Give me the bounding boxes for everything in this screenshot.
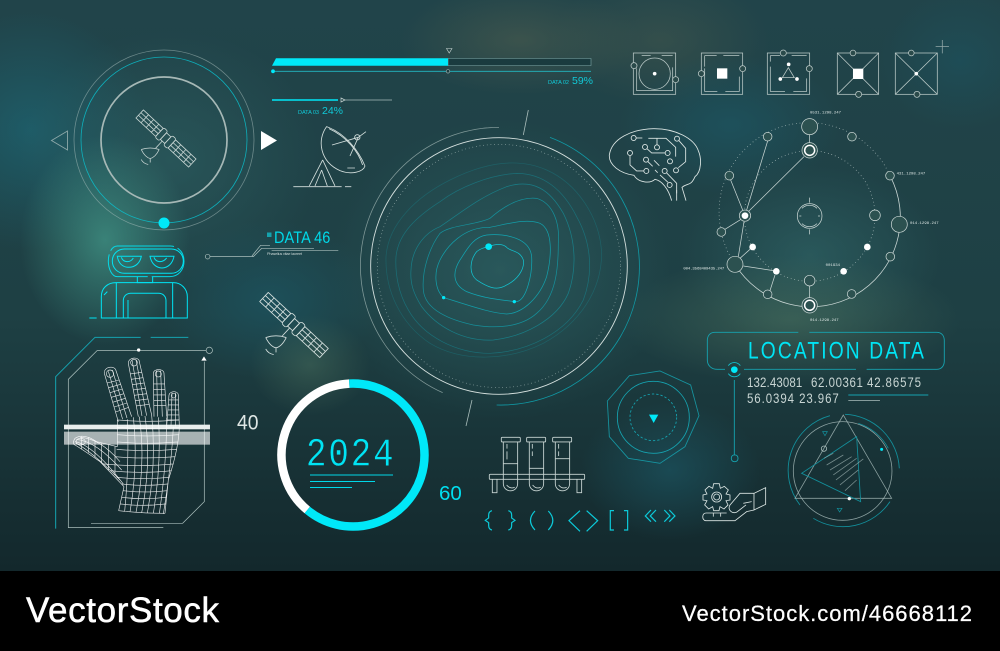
- middle finger: [128, 358, 152, 417]
- links: [725, 135, 810, 298]
- donut 2024: [281, 384, 424, 527]
- data 46 label: Phasellus vitae laoreet: [267, 252, 303, 256]
- contour map: [360, 110, 639, 405]
- bar: data 03: 24%: [322, 105, 343, 117]
- label: 40: 40: [237, 412, 258, 435]
- bar: data 02: [271, 48, 593, 87]
- bar: data 02: 59%: [572, 75, 593, 87]
- node labels: 014.1298.247: [910, 222, 939, 226]
- thumb: [73, 436, 124, 487]
- index finger: [104, 367, 132, 422]
- frame inner: [68, 347, 212, 528]
- data 46 label: DATA 46: [274, 229, 330, 247]
- hub: [797, 204, 822, 228]
- donut 2024: 2024: [306, 433, 394, 478]
- wordmark: VectorStock: [26, 591, 220, 630]
- icon row: frames: [631, 40, 949, 97]
- bar: data 02: DATA 02: [548, 80, 569, 86]
- marker dots: [442, 243, 516, 303]
- bar: data 03: [272, 98, 392, 117]
- frame 4: [837, 50, 879, 97]
- frame 2: [698, 53, 746, 94]
- data 46 label: [205, 229, 338, 259]
- coordinates: 132.43081: [747, 375, 802, 390]
- footer band: [0, 571, 1000, 651]
- icon: gear and hand: [703, 484, 766, 521]
- node labels: 014.1298.247: [810, 319, 839, 323]
- icon: satellite: [115, 109, 197, 189]
- plus mark: [936, 40, 949, 53]
- scan bars: [64, 425, 210, 429]
- coordinates: 56.0394 23.967: [747, 391, 839, 406]
- rings: [735, 176, 900, 307]
- frame outer: [56, 337, 188, 529]
- contours: [386, 163, 602, 357]
- hand wireframe: [73, 358, 179, 514]
- frame 5: [895, 50, 937, 97]
- icon: satellite small: [236, 292, 329, 383]
- icon: octagon target: [607, 371, 699, 463]
- frame 3: [767, 50, 812, 94]
- frame 1: [631, 53, 679, 94]
- coordinates: 62.00361: [811, 375, 863, 390]
- orbit gauge with satellite: [52, 50, 277, 230]
- nodes: [717, 119, 907, 313]
- node labels: 001934: [826, 264, 841, 268]
- hand scanner: [56, 337, 212, 529]
- panel frame and connector: [707, 332, 944, 462]
- palm: [103, 415, 179, 514]
- donut cyan arc: [307, 384, 424, 527]
- panel title: LOCATION DATA: [748, 336, 924, 364]
- progress bars: [271, 48, 593, 117]
- icon: triangle radar: [788, 414, 899, 527]
- icon: test tubes: [489, 437, 585, 493]
- icon row: brackets: [485, 510, 675, 531]
- icon: right triangle: [261, 131, 277, 150]
- node labels: [683, 111, 939, 323]
- little finger: [167, 392, 179, 427]
- icon: left triangle: [52, 131, 68, 150]
- donut white arc: [281, 384, 349, 510]
- location data panel: [707, 332, 944, 462]
- node labels: 431.1298.247: [897, 172, 926, 176]
- label: 60: 60: [439, 482, 462, 505]
- tick mark: [466, 400, 472, 426]
- coordinates: [747, 375, 921, 406]
- icon: robot: [89, 246, 187, 318]
- icon: satellite dish: [293, 127, 366, 187]
- ring finger: [153, 370, 167, 417]
- coordinates: 42.86575: [867, 375, 921, 390]
- connector line: [205, 245, 338, 259]
- rings: [360, 110, 639, 405]
- node labels: 0531.1298.247: [810, 111, 842, 115]
- network diagram: [683, 111, 939, 323]
- url: VectorStock.com/46668112: [682, 601, 972, 626]
- icon: brain: [609, 129, 701, 201]
- bar: data 03: DATA 03: [298, 110, 319, 116]
- node labels: 004.3568409435.247: [683, 267, 725, 271]
